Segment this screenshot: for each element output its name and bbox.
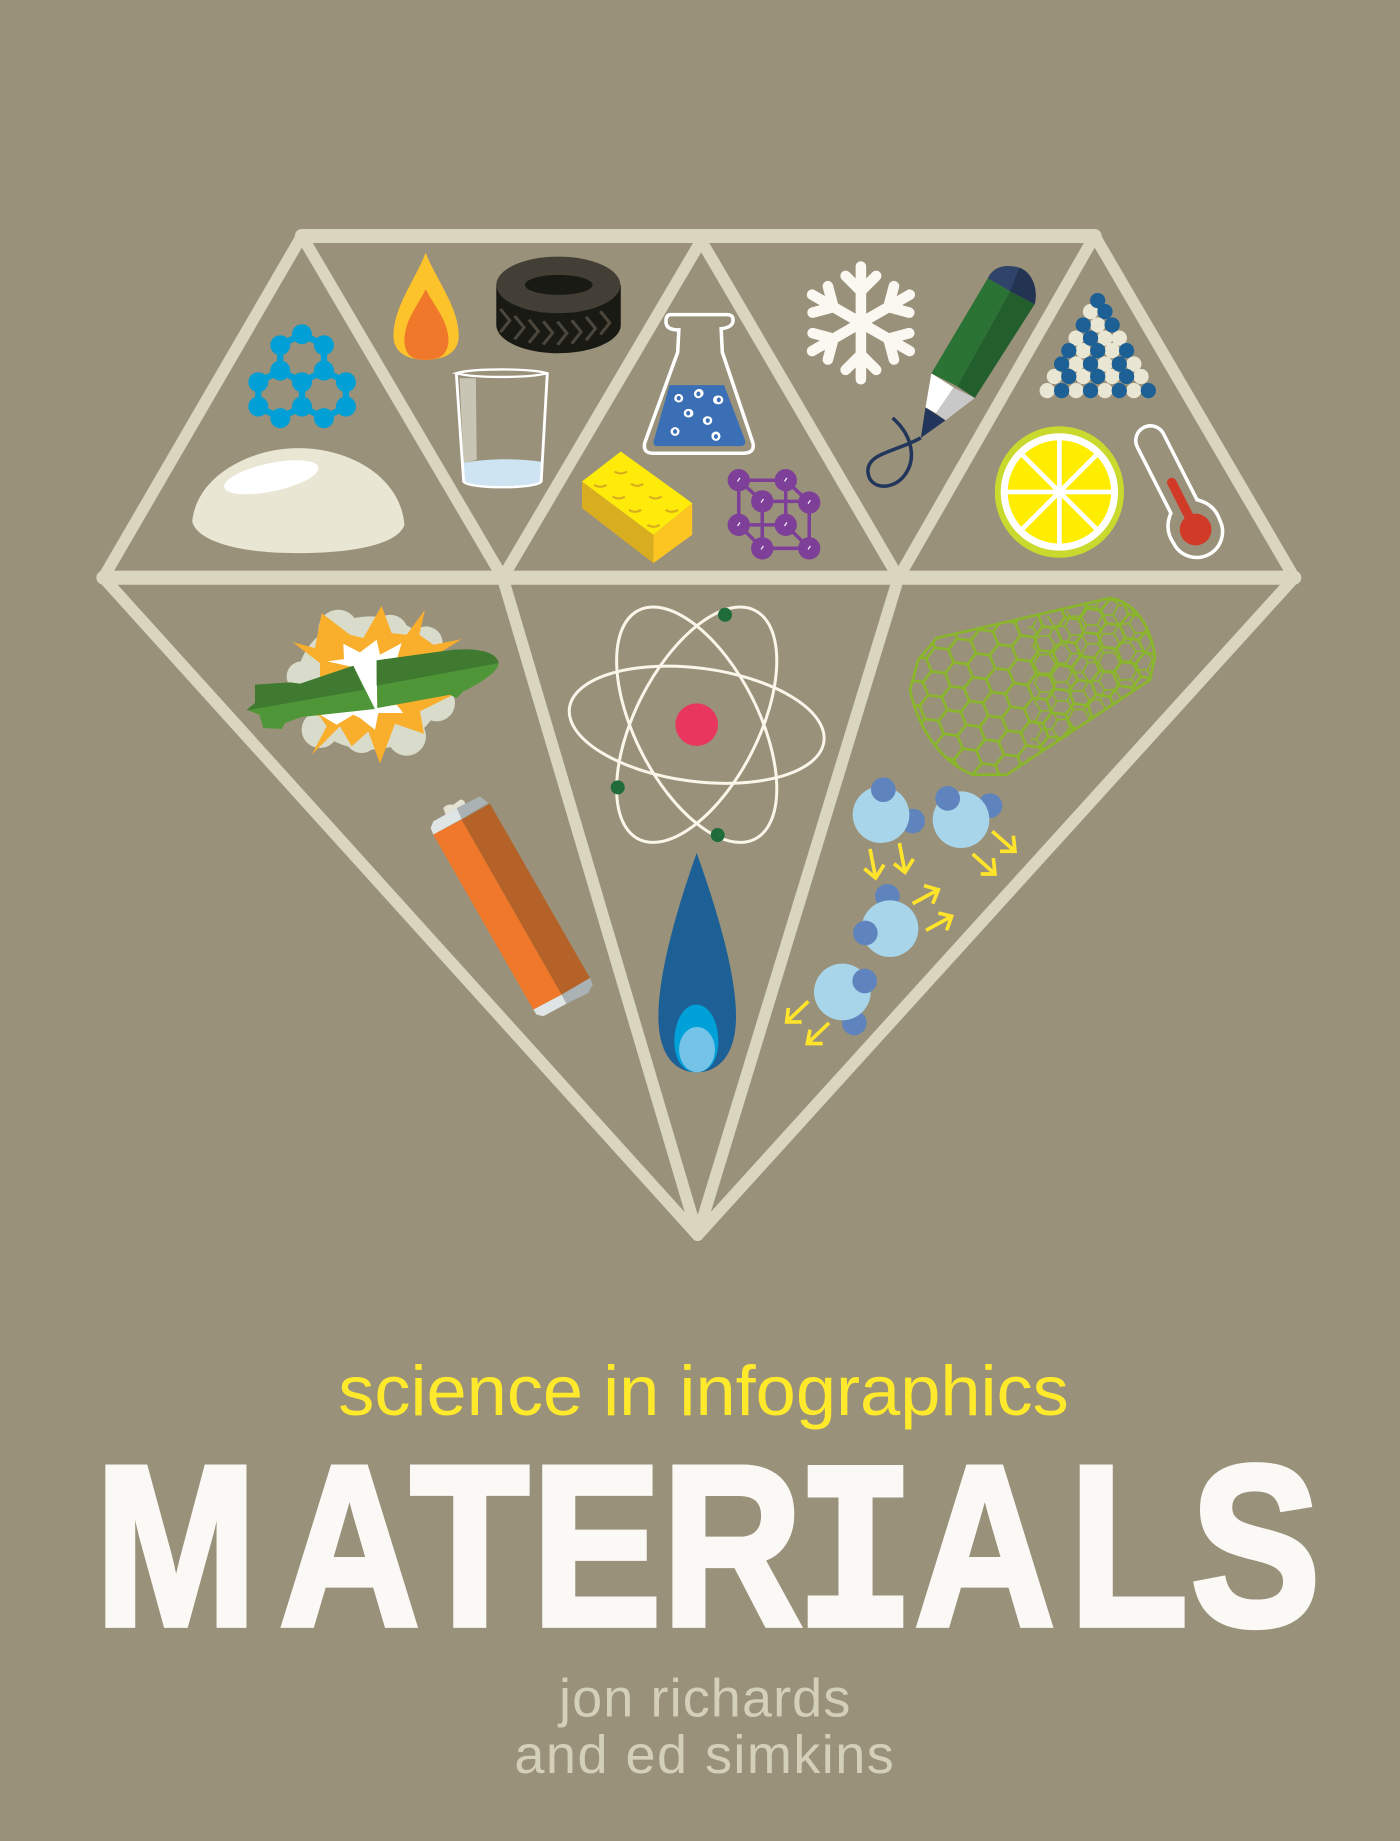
- series title: science in infographics: [338, 1351, 1069, 1430]
- main title: A: [279, 1419, 420, 1675]
- icon: conical flask: [644, 315, 753, 453]
- icon: rubber tyre: [496, 257, 621, 353]
- icon: moving particles: [787, 777, 1015, 1044]
- main title: E: [532, 1419, 662, 1675]
- icon: yellow flame: [393, 253, 459, 360]
- main title: S: [1191, 1419, 1320, 1675]
- icon: carbon nanotube: [910, 598, 1155, 775]
- icon: exploding airship: [247, 606, 499, 764]
- main title: R: [662, 1419, 802, 1675]
- main title: A: [914, 1419, 1055, 1675]
- icon: pyramid of spheres: [1040, 293, 1156, 398]
- author: ed simkins: and ed simkins: [514, 1725, 894, 1785]
- main title: I: [795, 1428, 916, 1697]
- icon: liquid droplet dome: [192, 448, 404, 553]
- diamond frame: [103, 236, 1294, 1235]
- main title: L: [1069, 1419, 1188, 1675]
- icon: snowflake: [804, 267, 917, 379]
- main title: T: [410, 1419, 529, 1675]
- icon: crystal lattice: [728, 469, 820, 559]
- icon: glass of water: [456, 369, 547, 487]
- icon: blue gas flame: [658, 853, 736, 1072]
- author: jon richards: jon richards: [557, 1669, 850, 1729]
- icon: graphene molecule: [248, 324, 356, 428]
- icon: lemon slice: [995, 426, 1124, 558]
- icon: toy brick: [582, 452, 692, 563]
- icon: battery: [431, 796, 593, 1016]
- icon: thermometer: [1120, 416, 1232, 567]
- main title: M: [95, 1419, 257, 1675]
- icon: marker pen: [868, 266, 1036, 486]
- icon: atom: [562, 582, 831, 867]
